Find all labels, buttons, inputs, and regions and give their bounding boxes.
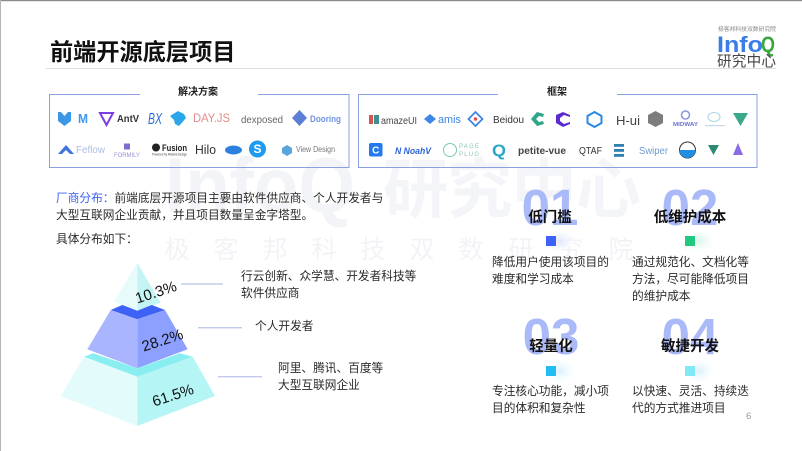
logo: Feflow	[58, 144, 105, 156]
callout: middle tier	[198, 319, 314, 333]
logo: H-ui: H-ui	[616, 113, 640, 128]
logo: M: M	[78, 111, 88, 126]
heading: 轻量化	[529, 337, 573, 355]
logo: cyan Q: Q	[492, 141, 506, 160]
heading: 敏捷开发	[661, 337, 719, 355]
description: 降低用户使用该项目的	[492, 255, 609, 269]
logo: Vue	[708, 145, 719, 155]
callout: top tier: 软件供应商	[241, 286, 299, 300]
panel: solutions	[50, 85, 349, 168]
logo: S circle	[249, 140, 266, 158]
marker square	[681, 227, 717, 255]
label: 28.2%: 28.2%	[140, 326, 185, 355]
pyramid tier: middle	[87, 305, 188, 368]
logo: Hilo: Hilo	[195, 142, 216, 157]
number 03: 03	[523, 308, 579, 365]
number 02: 02	[662, 179, 718, 236]
logo: green C	[531, 112, 544, 126]
description	[632, 384, 749, 415]
logo: View Design	[282, 144, 335, 156]
logo: stripes	[614, 144, 624, 157]
logo: Beidou: Beidou	[493, 114, 524, 126]
logo: DAY.JS: DAY.JS	[193, 113, 230, 125]
logo: QTAF: QTAF	[579, 146, 602, 157]
feature 01: low barrier	[492, 179, 609, 286]
logo: PAGE PLUG	[444, 144, 479, 158]
text block: vendor distribution: 厂商分布：前端底层开源项目主要由软件供应商、个人开发者与	[56, 191, 383, 205]
heading: frameworks: 框架	[547, 85, 567, 98]
logo: shield V	[58, 112, 71, 126]
logo: blue square C: C	[372, 146, 379, 156]
logo: InfoQ research center: 极客邦科技双数研究院	[718, 25, 776, 33]
logo: amis: amis	[438, 114, 461, 126]
heading: solutions: 解决方案	[178, 85, 218, 98]
logo: InfoQ research center	[717, 25, 776, 70]
watermark: 极客邦科技双数研究院	[164, 236, 634, 264]
description: 以快速、灵活、持续迭	[632, 384, 749, 398]
logo: View Design: View Design	[296, 144, 335, 154]
logo: BX: BX	[148, 111, 163, 128]
chart: pyramid	[61, 263, 215, 426]
label: 61.5%: 61.5%	[150, 381, 196, 410]
logo: amazeUI	[369, 115, 417, 127]
logo: blue square C	[369, 143, 382, 156]
pyramid tier: bottom	[61, 353, 215, 426]
description: 代的方式推进项目	[632, 401, 726, 415]
logo: Fusion: Fusion	[162, 143, 187, 154]
logo: amazeUI: amazeUI	[381, 116, 417, 127]
feature 02: low maintenance	[632, 179, 749, 303]
logo: PAGE PLUG: PAGE	[459, 144, 479, 150]
text block: vendor distribution: 具体分布如下：	[56, 232, 138, 246]
logo: Formily	[114, 144, 141, 159]
logo: S circle: S	[253, 142, 262, 156]
logo: amis	[424, 114, 461, 126]
watermark	[164, 141, 641, 264]
logo: Fusion: Powered by Alibaba Design	[152, 152, 187, 156]
logo: Dooring: Dooring	[310, 114, 341, 125]
logo: MIDWAY: MIDWAY	[673, 122, 698, 128]
description: 专注核心功能，减小项	[492, 384, 609, 398]
marker square	[542, 357, 578, 385]
pyramid tier: top	[114, 263, 161, 311]
logo: AntV	[100, 113, 139, 125]
callout: top tier: 行云创新、众学慧、开发者科技等	[241, 269, 417, 283]
description	[492, 384, 609, 415]
logo: green V	[733, 113, 748, 126]
number 01: 01	[522, 179, 578, 236]
callout: middle tier: 个人开发者	[255, 319, 314, 333]
marker square	[681, 357, 717, 385]
description: 目的体积和复杂性	[492, 401, 586, 415]
logo: blue diamond	[468, 112, 482, 126]
logo: PAGE PLUG: PLUG	[459, 152, 479, 158]
logo: gray cube	[648, 111, 663, 127]
feature 03: lightweight	[492, 308, 609, 415]
heading: 低门槛	[528, 208, 572, 226]
logo: petite-vue: petite-vue	[518, 145, 566, 157]
logo: purple C	[556, 112, 570, 127]
feature 04: agile development	[632, 308, 749, 415]
description: 通过规范化、文档化等	[632, 255, 749, 269]
marker square	[542, 227, 578, 255]
logo: AntV: AntV	[117, 114, 139, 125]
label: 10.3%: 10.3%	[133, 278, 179, 307]
heading: 低维护成本	[654, 208, 727, 226]
callout: bottom tier	[218, 361, 384, 392]
logo: Dooring	[292, 110, 341, 126]
logo: pale wings	[705, 112, 725, 126]
logo: blue hexagon	[588, 112, 602, 127]
description: 的维护成本	[632, 289, 691, 303]
logo: NoahV: N NoahV	[395, 146, 432, 156]
logo: Fusion	[152, 143, 187, 156]
text block: vendor distribution: 大型互联网企业贡献，并且项目数量呈金字塔型。	[56, 208, 313, 222]
description: 方法，尽可能降低项目	[632, 272, 749, 286]
number 04: 04	[662, 308, 719, 365]
logo: multicolour triangle	[733, 143, 743, 155]
logo: Swiper: Swiper	[639, 145, 668, 157]
logo: cyan ribbon	[170, 111, 186, 126]
text block: vendor distribution	[56, 191, 383, 246]
watermark: 研究中心	[383, 153, 641, 226]
logo: MIDWAY	[673, 111, 698, 128]
title: 前端开源底层项目	[50, 39, 236, 65]
logo: InfoQ research center: Info	[717, 32, 763, 57]
logo: blue eye	[225, 146, 242, 154]
logo: InfoQ research center: Q	[761, 32, 775, 57]
description	[492, 255, 609, 286]
logo: Feflow: Feflow	[76, 144, 105, 156]
logo: InfoQ research center: 研究中心	[717, 53, 776, 70]
description	[632, 255, 749, 303]
description: 难度和学习成本	[492, 272, 574, 286]
logo: dexposed: dexposed	[241, 114, 283, 126]
callout: top tier	[181, 269, 417, 300]
logo: Formily: FORMILY	[114, 152, 141, 159]
callout: bottom tier: 阿里、腾讯、百度等	[278, 361, 384, 375]
logo: half-filled circle	[680, 142, 696, 158]
panel: frameworks	[358, 85, 757, 168]
callout: bottom tier: 大型互联网企业	[278, 378, 360, 392]
watermark: InfoQ	[165, 141, 355, 229]
page number: 6	[746, 411, 751, 422]
